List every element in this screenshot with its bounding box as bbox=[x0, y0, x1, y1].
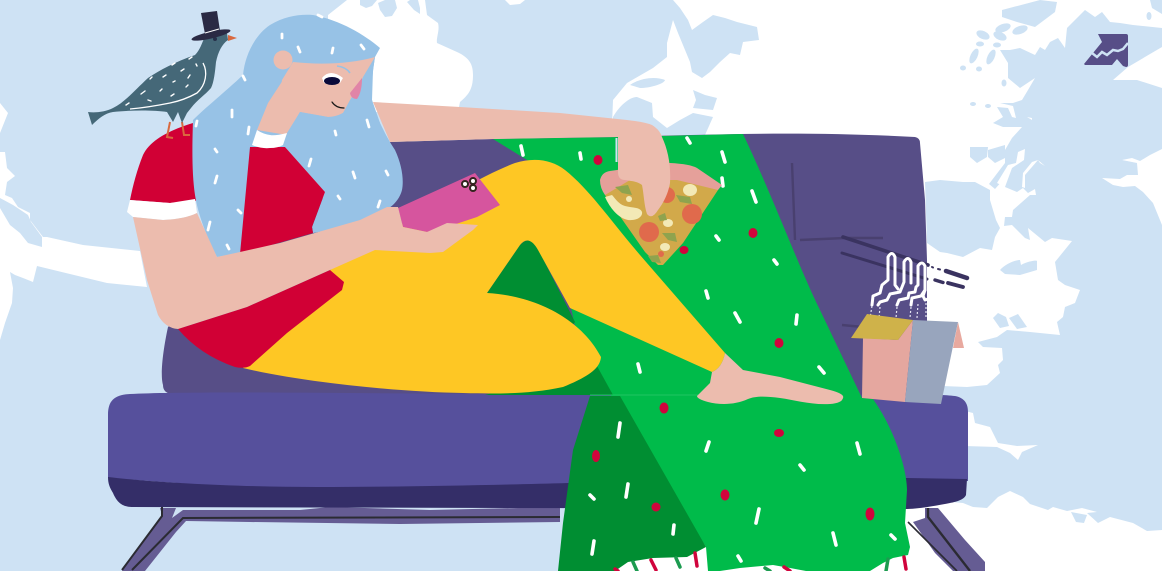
phone bbox=[398, 173, 500, 232]
nose bbox=[350, 78, 362, 99]
blanket: main green bbox=[493, 134, 910, 571]
map: small top islands bbox=[360, 0, 525, 17]
map: left landmass bbox=[0, 0, 759, 571]
blanket: red flecks bbox=[592, 155, 874, 520]
shirt: shoulder bbox=[130, 123, 215, 203]
blanket: shadow behind knee bbox=[487, 240, 575, 340]
pizza: cheese bbox=[605, 184, 697, 251]
pizza: crust bbox=[600, 163, 722, 195]
sofa: right leg paint bbox=[913, 508, 985, 571]
reaching arm bbox=[373, 102, 670, 216]
sofa bbox=[108, 134, 985, 571]
map: east coast islands bbox=[612, 78, 717, 135]
blanket: white flecks bbox=[521, 138, 895, 561]
smile bbox=[332, 102, 344, 108]
blanket: shadow under thigh bbox=[485, 366, 613, 395]
eye bbox=[322, 73, 343, 85]
logo: trend line bbox=[1092, 43, 1128, 57]
foot bbox=[697, 353, 843, 404]
map: peninsula in the strait bbox=[0, 198, 42, 247]
sofa: backrest stitching bbox=[792, 163, 883, 327]
noodles bbox=[872, 254, 928, 305]
bird: legs bbox=[167, 122, 190, 138]
neck bbox=[257, 80, 320, 135]
chopsticks bbox=[842, 237, 967, 287]
box: side face bbox=[905, 320, 958, 404]
eyebrow bbox=[337, 66, 350, 73]
legs: yellow trousers bbox=[243, 160, 725, 393]
box: back flap bbox=[953, 322, 964, 348]
bird: top hat bbox=[191, 11, 231, 43]
collar bbox=[252, 130, 287, 148]
phone: camera lenses bbox=[462, 178, 476, 191]
pizza slice bbox=[600, 163, 722, 265]
bird: feathers bbox=[126, 57, 197, 105]
hair bbox=[192, 15, 403, 257]
map: right islands bbox=[925, 0, 1162, 523]
sleeve cuff bbox=[127, 199, 197, 220]
map: white strait on left bbox=[0, 152, 147, 340]
pizza: herbs bbox=[615, 185, 692, 263]
holding arm bbox=[133, 207, 478, 329]
right hair strand over neck bbox=[352, 57, 375, 100]
sofa: left leg paint bbox=[122, 507, 560, 571]
bird: body bbox=[88, 32, 228, 125]
shirt: lower torso bbox=[178, 270, 344, 368]
map: gulf on top right bbox=[1113, 47, 1162, 88]
woman bbox=[127, 15, 843, 404]
logo icon bbox=[1084, 34, 1128, 67]
shirt: chest bbox=[240, 147, 325, 254]
ear bbox=[274, 50, 292, 70]
pizza: tomato bbox=[639, 187, 702, 257]
sofa: backrest bbox=[162, 134, 930, 400]
map: white bay at top bbox=[328, 0, 473, 112]
blanket: fringe bbox=[615, 553, 906, 571]
blanket: shadow fold bbox=[558, 396, 706, 571]
blanket: seat crease bbox=[590, 394, 700, 396]
sofa: seat cushion bbox=[108, 392, 968, 492]
map: right landmass bbox=[930, 10, 1162, 531]
hair highlights bbox=[196, 15, 388, 249]
box: front face bbox=[862, 320, 913, 402]
map: inlet on right bbox=[965, 411, 1038, 460]
blanket bbox=[485, 134, 910, 571]
box: gold flap bbox=[851, 314, 913, 340]
sofa: frame lines bbox=[122, 507, 970, 571]
face bbox=[280, 57, 375, 117]
noodles: steam dither bbox=[870, 303, 926, 318]
bird: wing line bbox=[130, 63, 206, 109]
map: fjord channels bbox=[997, 117, 1045, 188]
noodle box bbox=[842, 237, 967, 404]
sofa: cushion front bbox=[108, 477, 967, 509]
bird: eye bbox=[213, 37, 217, 41]
pizza: base bbox=[605, 180, 718, 265]
bird bbox=[88, 11, 237, 138]
bird: beak bbox=[228, 35, 237, 41]
sliver of map beside the finger bbox=[616, 138, 618, 162]
map: bay on right edge bbox=[1102, 149, 1162, 225]
